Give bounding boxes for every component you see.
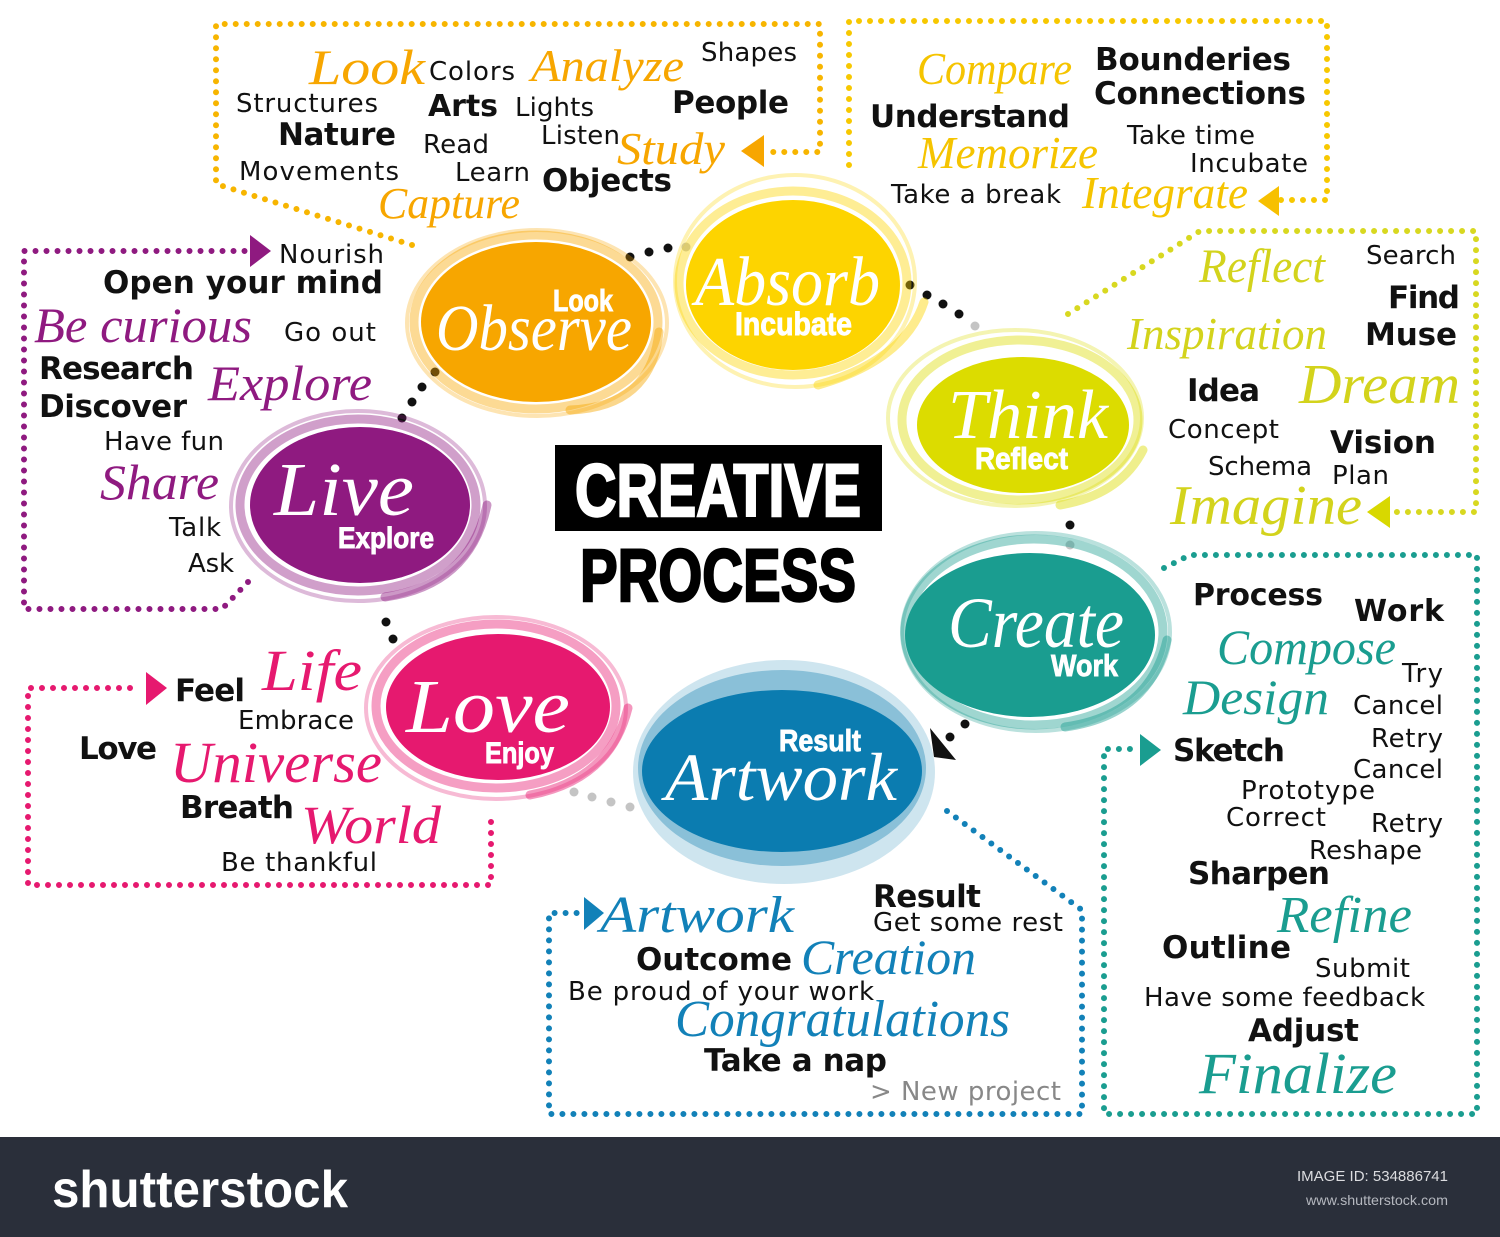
panel: artwork and result: Result <box>873 879 981 915</box>
panel: create and work <box>1104 555 1477 1114</box>
panel: artwork and result: Outcome <box>636 942 792 978</box>
panel: live and explore: Have fun <box>104 427 224 457</box>
title: CREATIVE <box>575 449 861 532</box>
panel: live and explore: Research <box>39 351 194 387</box>
panel: look and capture: Learn <box>455 158 530 188</box>
panel: live and explore: Share <box>100 454 219 510</box>
circle: observe <box>407 230 667 416</box>
panel: live and explore: Be curious <box>34 297 252 353</box>
panel: think and reflect: Find <box>1388 280 1460 316</box>
panel: absorb and incubate: Incubate <box>1190 149 1308 179</box>
panel: think and reflect: Inspiration <box>1126 308 1327 359</box>
panel: look and capture: People <box>672 85 789 121</box>
panel: create and work: Work <box>1354 594 1445 629</box>
panel: look and capture: Structures <box>236 89 378 119</box>
circle: live: Explore <box>338 522 434 555</box>
panel: look and capture: Read <box>423 130 489 160</box>
panel: create and work: Cancel <box>1353 755 1443 785</box>
panel: think and reflect: Reflect <box>1198 240 1327 293</box>
panel: create and work: Refine <box>1276 887 1412 944</box>
panel: artwork and result: Creation <box>801 929 976 985</box>
panel: create and work: Cancel <box>1353 691 1443 721</box>
panel: create and work: Submit <box>1315 954 1410 984</box>
footer bar: shutterstock <box>52 1161 348 1219</box>
circle: live <box>231 411 487 601</box>
panel: absorb and incubate: Integrate <box>1081 167 1248 218</box>
panel: artwork and result: Congratulations <box>675 991 1010 1048</box>
panel: think and reflect <box>1068 231 1476 537</box>
panel: look and capture: Arts <box>428 89 498 124</box>
footer bar: IMAGE ID: 534886741 <box>1297 1168 1448 1185</box>
panel: look and capture: Listen <box>541 121 620 151</box>
panel: love and enjoy: Life <box>261 638 362 703</box>
circle: love: Enjoy <box>485 737 554 770</box>
circle: create: Work <box>1051 648 1119 683</box>
panel: absorb and incubate: Connections <box>1094 76 1306 112</box>
panel: create and work: Outline <box>1162 930 1291 966</box>
panel: live and explore: Go out <box>284 318 376 348</box>
panel: absorb and incubate: Take time <box>1126 121 1255 151</box>
panel: look and capture: Study <box>617 123 726 174</box>
panel: look and capture: Capture <box>378 179 520 228</box>
panel: absorb and incubate: Take a break <box>890 180 1061 210</box>
panel: love and enjoy <box>28 638 491 885</box>
panel: love and enjoy: Breath <box>180 790 294 826</box>
panel: live and explore: Talk <box>168 513 221 543</box>
circle: artwork: Result <box>779 723 861 758</box>
panel: love and enjoy: World <box>301 795 442 855</box>
circle: artwork: Artwork <box>661 739 899 815</box>
panel: think and reflect: Imagine <box>1169 475 1362 537</box>
panel: think and reflect: Vision <box>1330 425 1436 461</box>
panel: artwork and result <box>549 811 1082 1114</box>
panel: artwork and result: Take a nap <box>704 1043 887 1079</box>
panel: look and capture: Lights <box>515 93 594 123</box>
panel: look and capture: Objects <box>542 163 672 199</box>
circle: create: Create <box>948 583 1124 663</box>
panel: artwork and result: Be proud of your work <box>568 977 874 1007</box>
circle: artwork <box>633 660 935 884</box>
panel: create and work: Prototype <box>1241 776 1375 806</box>
panel: live and explore: Explore <box>207 355 372 411</box>
circle: create <box>902 533 1170 731</box>
title <box>555 445 882 617</box>
panel: create and work: Design <box>1182 669 1329 725</box>
panel: look and capture: Look <box>308 39 426 95</box>
panel: look and capture: Analyze <box>528 40 684 91</box>
panel: look and capture: Colors <box>429 57 515 87</box>
panel: create and work: Have some feedback <box>1144 983 1425 1013</box>
panel: live and explore <box>24 235 384 609</box>
panel: create and work: Try <box>1401 659 1443 689</box>
connector dots between circles <box>382 242 1074 812</box>
circle: think: Reflect <box>975 441 1068 476</box>
panel: think and reflect: Dream <box>1298 354 1460 416</box>
footer bar <box>0 1137 1500 1237</box>
arrowhead into artwork <box>930 728 956 760</box>
panel: create and work: Sharpen <box>1188 856 1330 892</box>
panel: artwork and result: > New project <box>870 1077 1061 1107</box>
circle: observe: Look <box>553 283 614 318</box>
panel: live and explore: Open your mind <box>103 265 383 301</box>
panel: absorb and incubate: Memorize <box>917 127 1098 178</box>
panel: artwork and result: Artwork <box>597 887 795 944</box>
circle: love: Love <box>405 665 570 749</box>
panel: look and capture: Nature <box>278 117 396 153</box>
panel: love and enjoy: Be thankful <box>221 848 377 878</box>
panel: live and explore: Nourish <box>279 240 384 270</box>
circle: absorb: Absorb <box>691 244 880 321</box>
panel: love and enjoy: Feel <box>175 673 245 709</box>
circle: think <box>888 330 1143 506</box>
panel: create and work: Correct <box>1226 803 1326 833</box>
footer bar: www.shutterstock.com <box>1305 1192 1448 1208</box>
panel: love and enjoy: Universe <box>170 730 382 795</box>
circle: live: Live <box>273 448 414 532</box>
panel: absorb and incubate: Bounderies <box>1095 42 1291 78</box>
circle: absorb: Incubate <box>735 306 852 342</box>
panel: create and work: Reshape <box>1309 836 1422 866</box>
circle: absorb <box>675 175 924 387</box>
panel: think and reflect: Plan <box>1332 461 1389 491</box>
panel: create and work: Retry <box>1371 809 1443 839</box>
panel: think and reflect: Idea <box>1187 373 1260 409</box>
panel: absorb and incubate: Compare <box>917 43 1072 94</box>
panel: look and capture <box>216 24 820 245</box>
panel: absorb and incubate: Understand <box>870 99 1070 135</box>
panel: think and reflect: Concept <box>1168 415 1279 445</box>
panel: think and reflect: Schema <box>1208 452 1312 482</box>
panel: think and reflect: Search <box>1366 241 1456 271</box>
panel: absorb and incubate <box>849 21 1327 218</box>
circle: love <box>366 617 628 799</box>
circle: think: Think <box>948 377 1110 454</box>
panel: create and work: Finalize <box>1198 1041 1397 1106</box>
panel: create and work: Sketch <box>1173 733 1285 769</box>
panel: love and enjoy: Love <box>79 731 157 767</box>
circle: observe: Observe <box>436 292 632 365</box>
panel: create and work: Compose <box>1217 619 1396 675</box>
panel: look and capture: Shapes <box>701 38 797 68</box>
panel: look and capture: Movements <box>239 157 399 187</box>
panel: create and work: Retry <box>1371 724 1443 754</box>
panel: love and enjoy: Embrace <box>238 706 354 736</box>
panel: create and work: Process <box>1193 578 1323 613</box>
title: PROCESS <box>580 534 856 617</box>
panel: think and reflect: Muse <box>1365 317 1457 353</box>
panel: live and explore: Discover <box>39 389 188 425</box>
panel: live and explore: Ask <box>188 549 234 579</box>
panel: artwork and result: Get some rest <box>873 908 1063 938</box>
panel: create and work: Adjust <box>1248 1013 1359 1049</box>
